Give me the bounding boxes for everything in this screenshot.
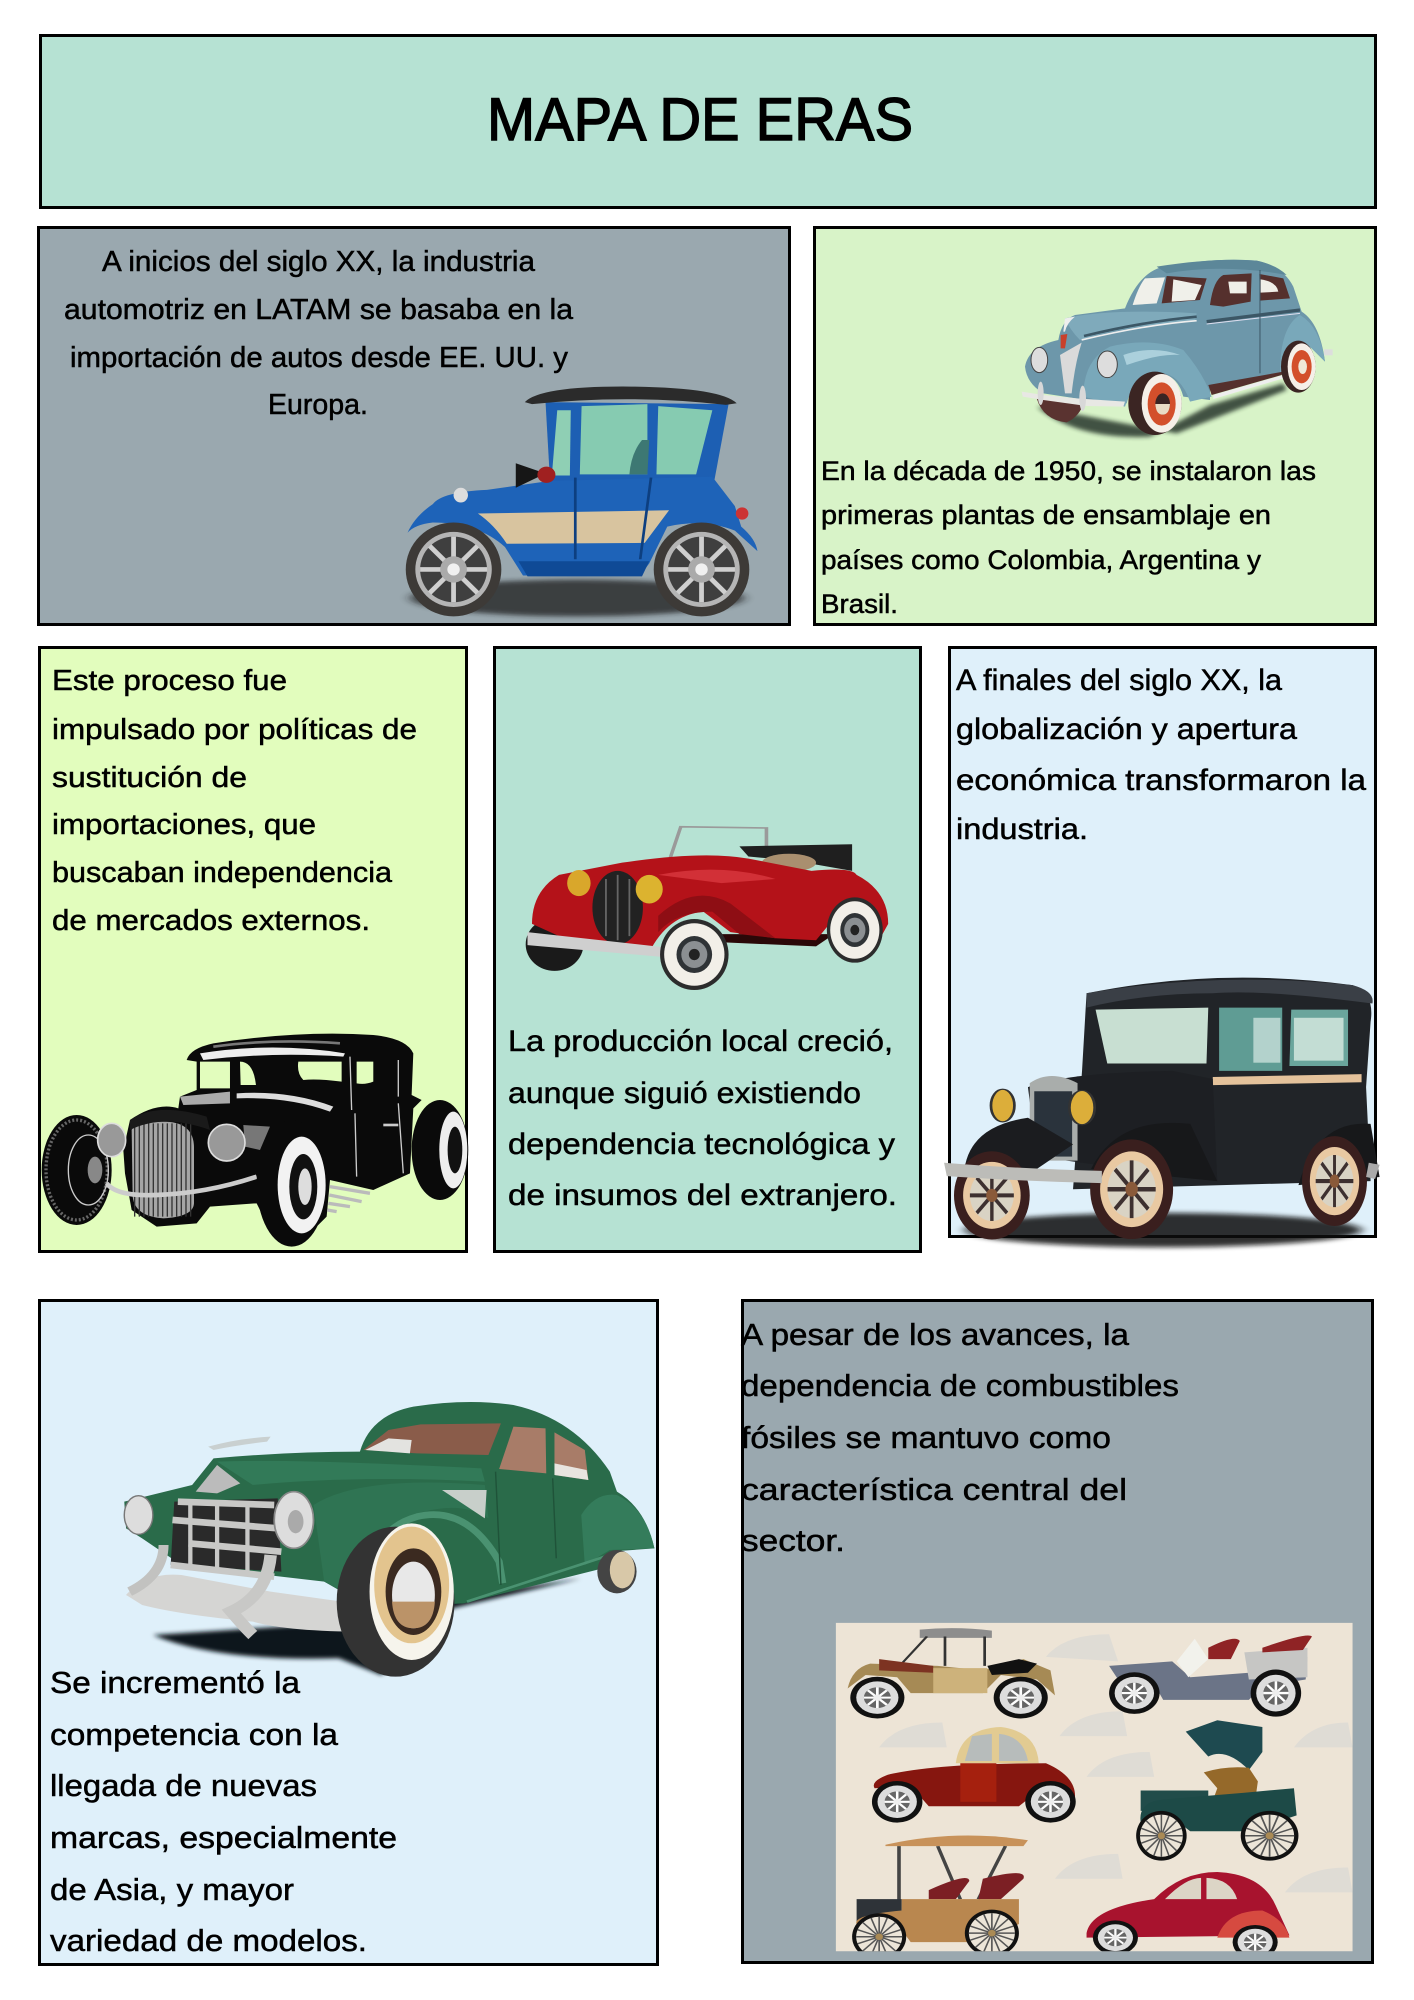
panel: title [40, 36, 1376, 208]
panel: inicios del siglo XX [38, 228, 790, 624]
text block: dependencia tecnológica y [508, 1128, 895, 1161]
text block [821, 456, 1316, 619]
car F: red compact [1087, 1872, 1289, 1959]
title: MAPA DE ERAS [487, 86, 913, 153]
car A: brown roadster [848, 1628, 1055, 1718]
icon: collage of vintage cars [836, 1623, 1353, 1960]
text block: fósiles se mantuvo como [741, 1420, 1111, 1455]
text block: países como Colombia, Argentina y [821, 545, 1262, 575]
car D: teal hood carriage [1136, 1720, 1298, 1861]
text block: La producción local creció, [508, 1025, 893, 1058]
text block: característica central del [741, 1472, 1127, 1507]
car E: tan buggy [852, 1836, 1028, 1960]
text block: de Asia, y mayor [50, 1872, 294, 1907]
text block: económica transformaron la [956, 764, 1366, 797]
panel: decada de 1950 [814, 228, 1376, 624]
text block: aunque siguió existiendo [508, 1077, 861, 1110]
text block: Brasil. [821, 589, 898, 619]
text block: Europa. [268, 389, 368, 421]
panel: combustibles fosiles [741, 1300, 1372, 1962]
text block: impulsado por políticas de [52, 714, 417, 746]
text block: Este proceso fue [52, 665, 287, 697]
text block: globalización y apertura [956, 713, 1297, 746]
text block: sustitución de [52, 762, 247, 794]
text block: buscaban independencia [52, 857, 393, 889]
panel: produccion local [494, 648, 920, 1252]
text block: A pesar de los avances, la [741, 1317, 1130, 1352]
text block [508, 1025, 897, 1212]
text block: A finales del siglo XX, la [956, 664, 1282, 697]
text block: variedad de modelos. [50, 1923, 367, 1958]
car B: grey tourer [1109, 1635, 1312, 1717]
text block: industria. [956, 813, 1088, 846]
text block: importaciones, que [52, 809, 316, 841]
icon: green classic car [124, 1402, 654, 1677]
car C: maroon coupe [872, 1727, 1076, 1823]
text block [956, 664, 1366, 846]
text block: A inicios del siglo XX, la industria [102, 246, 536, 278]
text block [52, 665, 417, 937]
text block: automotriz en LATAM se basaba en la [64, 294, 574, 326]
icon: blue-grey sedan [1022, 260, 1333, 437]
text block: En la década de 1950, se instalaron las [821, 456, 1316, 486]
text block [741, 1317, 1179, 1558]
text block: dependencia de combustibles [741, 1368, 1179, 1403]
icon: black hot rod [42, 1034, 468, 1247]
text block: de mercados externos. [52, 905, 370, 937]
panel: competencia [40, 1300, 658, 1964]
text block: importación de autos desde EE. UU. y [70, 342, 569, 374]
icon: red convertible [526, 827, 888, 990]
text block: Se incrementó la [50, 1665, 301, 1700]
icon: black sedan [944, 978, 1380, 1247]
panel: sustitucion de importaciones [40, 648, 468, 1252]
text block: primeras plantas de ensamblaje en [821, 500, 1271, 530]
text block [50, 1665, 397, 1958]
text block: de insumos del extranjero. [508, 1179, 897, 1212]
panel: globalizacion [944, 648, 1380, 1247]
text block: sector. [741, 1523, 845, 1558]
text block: marcas, especialmente [50, 1820, 397, 1855]
text block: competencia con la [50, 1717, 339, 1752]
icon: blue vintage car [406, 387, 757, 616]
text block: llegada de nuevas [50, 1768, 317, 1803]
text block [64, 246, 574, 421]
